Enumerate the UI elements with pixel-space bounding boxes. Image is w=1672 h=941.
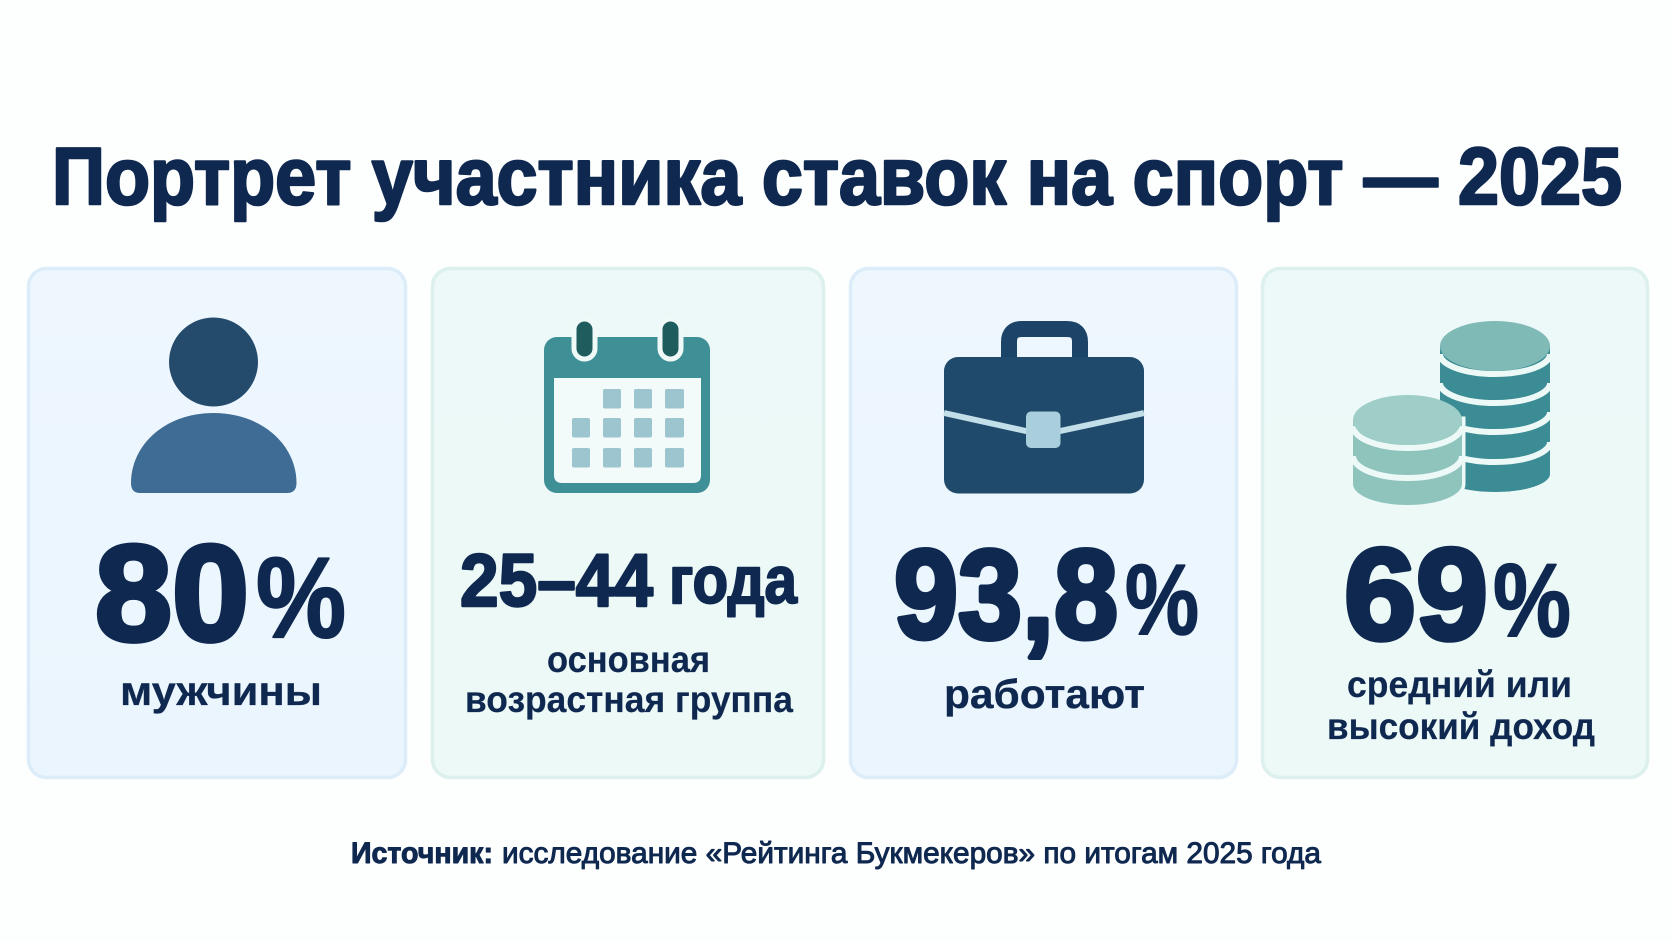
icon: calendar xyxy=(544,319,710,493)
stat: 69% xyxy=(1344,521,1571,667)
panel: age group xyxy=(432,268,824,778)
stat: 25–44 года xyxy=(460,539,798,622)
stat: 93,8%: 93,8 xyxy=(894,524,1118,665)
stat: 69%: % xyxy=(1493,543,1571,659)
icon: person xyxy=(131,318,296,493)
stat: 25–44 года: года xyxy=(669,543,798,618)
icon: briefcase xyxy=(944,329,1144,494)
stat: 80%: 80 xyxy=(95,517,249,669)
source note: исследование «Рейтинга Букмекеров» по итогам 2025 года xyxy=(502,837,1321,870)
label: main age group: возрастная группа xyxy=(465,679,793,720)
label: employed: работают xyxy=(944,671,1145,717)
left coin stack xyxy=(1353,395,1462,505)
stat: 69%: 69 xyxy=(1344,521,1488,667)
icon: coin stacks xyxy=(1353,321,1550,505)
stat: 80%: % xyxy=(256,535,346,662)
stat: 25–44 года: 25–44 xyxy=(460,539,653,622)
stat: 93,8%: % xyxy=(1125,544,1199,656)
source note: Источник: xyxy=(351,837,493,870)
label: men: мужчины xyxy=(120,668,322,714)
panel: income xyxy=(1262,268,1648,778)
right coin stack xyxy=(1440,321,1550,492)
label: main age group xyxy=(465,639,793,720)
label: income: высокий доход xyxy=(1327,706,1595,747)
label: main age group: основная xyxy=(547,639,710,680)
stat: 80% xyxy=(95,517,346,669)
label: income xyxy=(1327,664,1595,747)
label: income: средний или xyxy=(1347,664,1572,705)
panel: employed xyxy=(850,268,1236,778)
panel: men xyxy=(28,268,406,778)
